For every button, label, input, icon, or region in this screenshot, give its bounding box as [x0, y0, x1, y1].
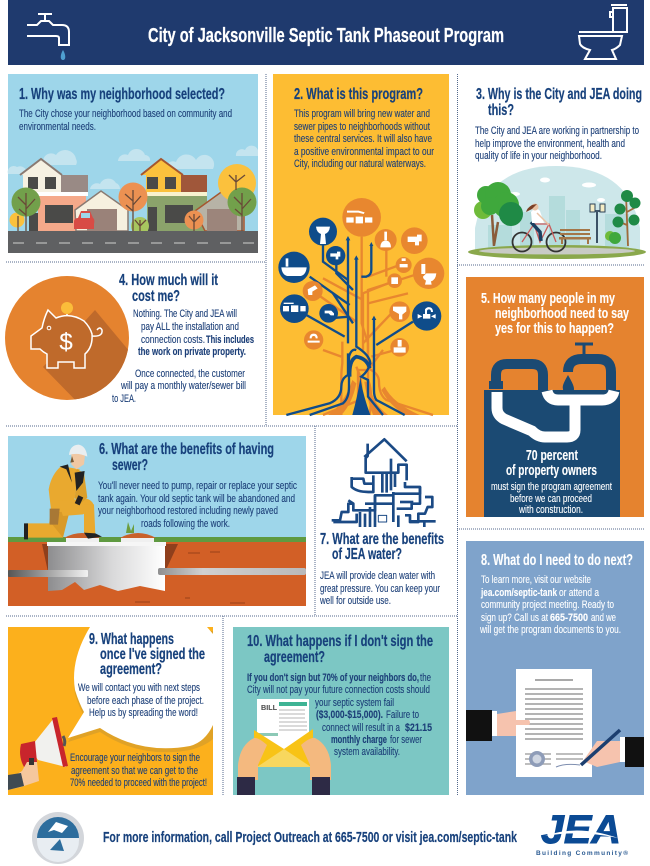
footer [32, 808, 628, 864]
body text 8: To learn more, visit our website [481, 574, 591, 586]
illustration: pipes and faucet [489, 344, 614, 437]
heading 4 [119, 272, 218, 305]
body text 10 [247, 672, 432, 758]
body text 9: We will contact you with next steps [78, 682, 200, 694]
illustration: house of pipes [332, 439, 436, 527]
heading 6 [99, 441, 274, 474]
heading 4: 4. How much will it [119, 272, 218, 289]
panel 5: how many people [466, 277, 644, 517]
heading 10: 10. What happens if I don't sign the [247, 633, 433, 650]
body text 8: and we [591, 612, 616, 624]
statistic: 70 percent: before we can proceed [510, 493, 592, 505]
body text 4: Once connected, the customer [135, 368, 245, 380]
body text 1: environmental needs. [19, 121, 96, 133]
body text 8: 665-7500 [550, 612, 588, 624]
statistic: 70 percent: 70 percent [526, 447, 578, 464]
body text 8: sign up? Call us at [481, 612, 549, 624]
body text 10: system availability. [334, 746, 400, 758]
speech bubble [68, 627, 213, 748]
header banner [8, 0, 644, 65]
illustration: septic tank [8, 522, 306, 603]
heading 2: 2. What is this program? [294, 86, 423, 103]
panel 3: why the City and JEA [468, 86, 646, 259]
body text 9: Help us by spreading the word! [89, 707, 198, 719]
call to action text: Encourage your neighbors to sign the [70, 752, 200, 764]
heading 6: sewer? [112, 457, 148, 474]
heading 7: of JEA water? [332, 546, 402, 563]
body text 2: This program will bring new water and [294, 108, 430, 120]
body text 10: monthly charge [331, 734, 387, 746]
call to action text: agreement so that we can get to the [71, 765, 198, 777]
panel 9: after signing the agreement [8, 627, 213, 795]
heading 9: agreement? [100, 661, 162, 678]
body text 8 [479, 574, 621, 636]
illustration: houses and street [8, 146, 258, 253]
illustration: cyclist in park [468, 166, 646, 259]
heading 5 [481, 290, 629, 337]
heading 1: 1. Why was my neighborhood selected? [19, 86, 225, 103]
body text 4: will pay a monthly water/sewer bill [120, 380, 246, 392]
body text 7: JEA will provide clean water with [320, 570, 435, 582]
statistic: 70 percent [491, 447, 613, 516]
statistic: 70 percent: of property owners [506, 462, 597, 479]
logo: JEA: Building Community® [536, 849, 628, 857]
body text 6: roads following the work. [141, 518, 230, 530]
icon: toilet [579, 5, 627, 59]
logo: JEA: JEA [541, 808, 621, 852]
body text 10: $21.15 [405, 722, 432, 734]
body text 7 [319, 570, 440, 607]
body text 4: Nothing. The City and JEA will [133, 308, 237, 320]
body text 6: your neighborhood restored including newly paved [98, 505, 278, 517]
heading 7: 7. What are the benefits [320, 531, 444, 548]
call to action text [70, 752, 207, 789]
body text 7: great pressure. You can keep your [320, 583, 440, 595]
panel 7: benefits of JEA water [319, 439, 444, 607]
body text 8: jea.com/septic-tank [480, 587, 558, 599]
body text 10: If you don't sign but 70% of your neighbors do, [247, 672, 419, 684]
heading 3 [476, 86, 642, 119]
body text 2: City, including our natural waterways. [294, 158, 426, 170]
illustration: kneeling worker [24, 445, 102, 539]
heading 9 [89, 631, 205, 678]
heading 10: agreement? [264, 649, 325, 666]
body text 10: for sewer [390, 734, 422, 746]
body text 4: connection costs. [141, 334, 205, 346]
panel 1: neighborhood [8, 74, 258, 253]
body text 10: connect will result in a [322, 722, 401, 734]
panel 2: what is this program [273, 74, 449, 415]
illustration: pipe tree [278, 198, 444, 415]
illustration: signing document [466, 669, 644, 777]
body text 6 [98, 480, 297, 530]
icon: faucet [27, 14, 69, 60]
body text 2: these central services. It will also have [294, 133, 432, 145]
illustration: bill in envelope [237, 699, 331, 795]
body text 10: ($3,000-$15,000). [316, 709, 383, 721]
icon: piggy bank: $ [59, 329, 73, 356]
heading 10 [247, 633, 433, 666]
body text 4: This includes [206, 334, 254, 346]
statistic: 70 percent: with construction. [518, 504, 583, 516]
body text 10: your septic system fail [315, 697, 394, 709]
body text 10: Failure to [386, 709, 419, 721]
panel 8: what do I need to do next [466, 541, 644, 795]
body text 8: or attend a [559, 587, 600, 599]
call to action text: 70% needed to proceed with the project! [70, 777, 207, 789]
seal: City of Jacksonville [32, 812, 84, 864]
body text 7: well for outside use. [319, 595, 391, 607]
body text 4: the work on private property. [138, 346, 246, 358]
heading 3: this? [488, 102, 514, 119]
body text 9 [78, 682, 204, 719]
icon: piggy bank [5, 276, 129, 400]
body text 10: City will not pay your future connection costs should [247, 684, 430, 696]
body text 10: the [420, 672, 431, 684]
body text 3: quality of life in your neighborhood. [475, 150, 602, 162]
body text 4: to JEA. [112, 393, 136, 405]
body text 1 [19, 108, 232, 133]
body text 1: The City chose your neighborhood based on community and [19, 108, 232, 120]
body text 4 [112, 308, 254, 405]
body text 2: sewer pipes to neighborhoods without [294, 121, 431, 133]
illustration: bill in envelope: BILL [261, 703, 277, 712]
heading 4: cost me? [132, 288, 180, 305]
body text 3 [475, 125, 639, 162]
panel 6: benefits of sewer [8, 436, 306, 606]
body text 9: before each phase of the project. [87, 695, 204, 707]
body text 6: You'll never need to pump, repair or replace your septic [98, 480, 297, 492]
heading 6: 6. What are the benefits of having [99, 441, 274, 458]
body text 4: pay ALL the installation and [141, 321, 239, 333]
body text 2: a positive environmental impact to our [294, 146, 434, 158]
title: City of Jacksonville Septic Tank Phaseout Program [148, 24, 504, 47]
body text 2 [294, 108, 434, 170]
panel 4: how much will it cost [5, 272, 254, 410]
heading 9: 9. What happens [89, 631, 174, 648]
panel 10: if I do not sign [233, 627, 449, 795]
icon: megaphone with hand [8, 717, 68, 790]
heading 9: once I've signed the [100, 646, 205, 663]
body text 6: tank again. Your old septic tank will be abandoned and [98, 493, 295, 505]
heading 7 [320, 531, 444, 563]
